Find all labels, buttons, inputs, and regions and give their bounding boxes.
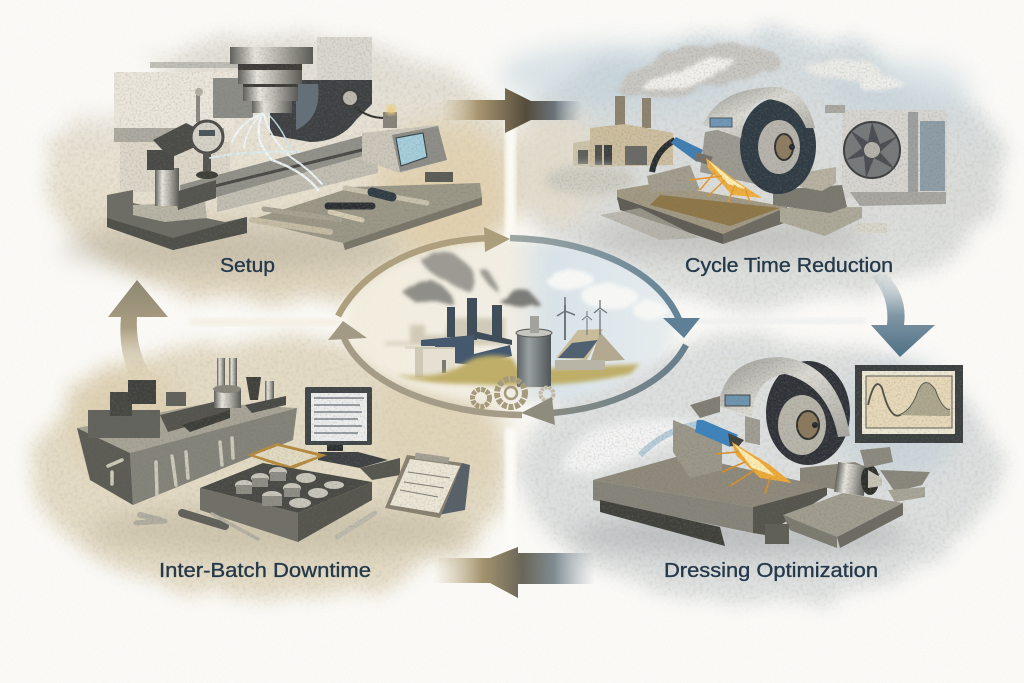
arrow: setup to cycle time	[443, 88, 582, 133]
center ellipse background	[345, 240, 675, 404]
workpiece blocks	[773, 167, 847, 213]
control unit	[362, 105, 453, 182]
sparks	[690, 158, 762, 202]
spindle	[230, 47, 313, 113]
framed plan	[247, 443, 327, 470]
grinding wheel	[690, 357, 850, 465]
panel: inter-batch downtime	[77, 358, 470, 582]
base platform	[600, 183, 887, 244]
solar panel	[555, 329, 625, 370]
panel: setup	[107, 37, 482, 277]
center scene: factory to green energy	[345, 240, 675, 407]
gears	[472, 379, 554, 407]
clipboard	[385, 453, 470, 518]
factory chimneys	[615, 96, 651, 128]
wind turbines	[557, 297, 607, 340]
grinding wheel	[700, 87, 816, 194]
factory building	[421, 335, 512, 365]
coolant spray	[210, 114, 322, 190]
smoke clouds	[617, 43, 905, 97]
spindle cylinder	[800, 447, 930, 502]
factory building	[573, 124, 673, 167]
arrow: dressing to inter-batch	[433, 547, 595, 598]
cycle time artwork	[545, 43, 947, 244]
rocky ground	[545, 165, 635, 195]
dial gauge	[147, 88, 223, 206]
wrenches on bench	[108, 438, 233, 495]
white clouds	[546, 270, 668, 319]
water spray cloud	[560, 419, 697, 475]
panel: cycle time reduction	[545, 43, 947, 277]
storage tank	[516, 316, 552, 387]
smoke	[402, 252, 542, 306]
arrow: ring top right	[510, 238, 700, 338]
dresser block	[673, 420, 722, 478]
sparks	[715, 442, 792, 494]
parts tray	[200, 463, 372, 542]
arrow: ring bottom right	[521, 345, 686, 425]
arrow: inter-batch to setup	[108, 280, 168, 376]
label: setup: Setup	[220, 255, 275, 277]
setup artwork	[107, 37, 482, 250]
workbench	[77, 380, 297, 505]
loose tools	[136, 513, 375, 539]
white annex	[405, 346, 455, 377]
label: cycle time reduction: Cycle Time Reduction	[685, 255, 893, 277]
arrow: cycle time to dressing	[871, 274, 935, 357]
machine rail	[217, 152, 378, 212]
monitor	[305, 387, 400, 480]
dressing artwork	[560, 357, 963, 548]
cylinder tooling	[213, 358, 286, 413]
arrow: ring bottom left	[328, 321, 522, 415]
distant skyline	[385, 318, 505, 345]
coolant nozzle	[647, 137, 713, 192]
hand tools	[252, 188, 427, 232]
grassy mound	[395, 355, 640, 386]
granite base	[107, 180, 247, 250]
machine column	[317, 37, 372, 83]
arrow: ring top left	[338, 227, 510, 316]
coolant nozzle	[695, 420, 744, 447]
air cooler	[825, 105, 947, 206]
base platform	[593, 455, 903, 548]
inter-batch artwork	[77, 358, 470, 542]
monitor with chart	[855, 365, 963, 443]
grinding wheel	[213, 78, 384, 142]
label: inter-batch downtime: Inter-Batch Downtime	[159, 560, 371, 582]
smokestacks	[447, 298, 512, 345]
back wall of machine	[114, 62, 240, 192]
center cycle ring arrows	[328, 227, 700, 425]
label: dressing optimization: Dressing Optimization	[664, 560, 878, 582]
tool slab	[250, 183, 482, 243]
panel: dressing optimization	[560, 357, 963, 582]
